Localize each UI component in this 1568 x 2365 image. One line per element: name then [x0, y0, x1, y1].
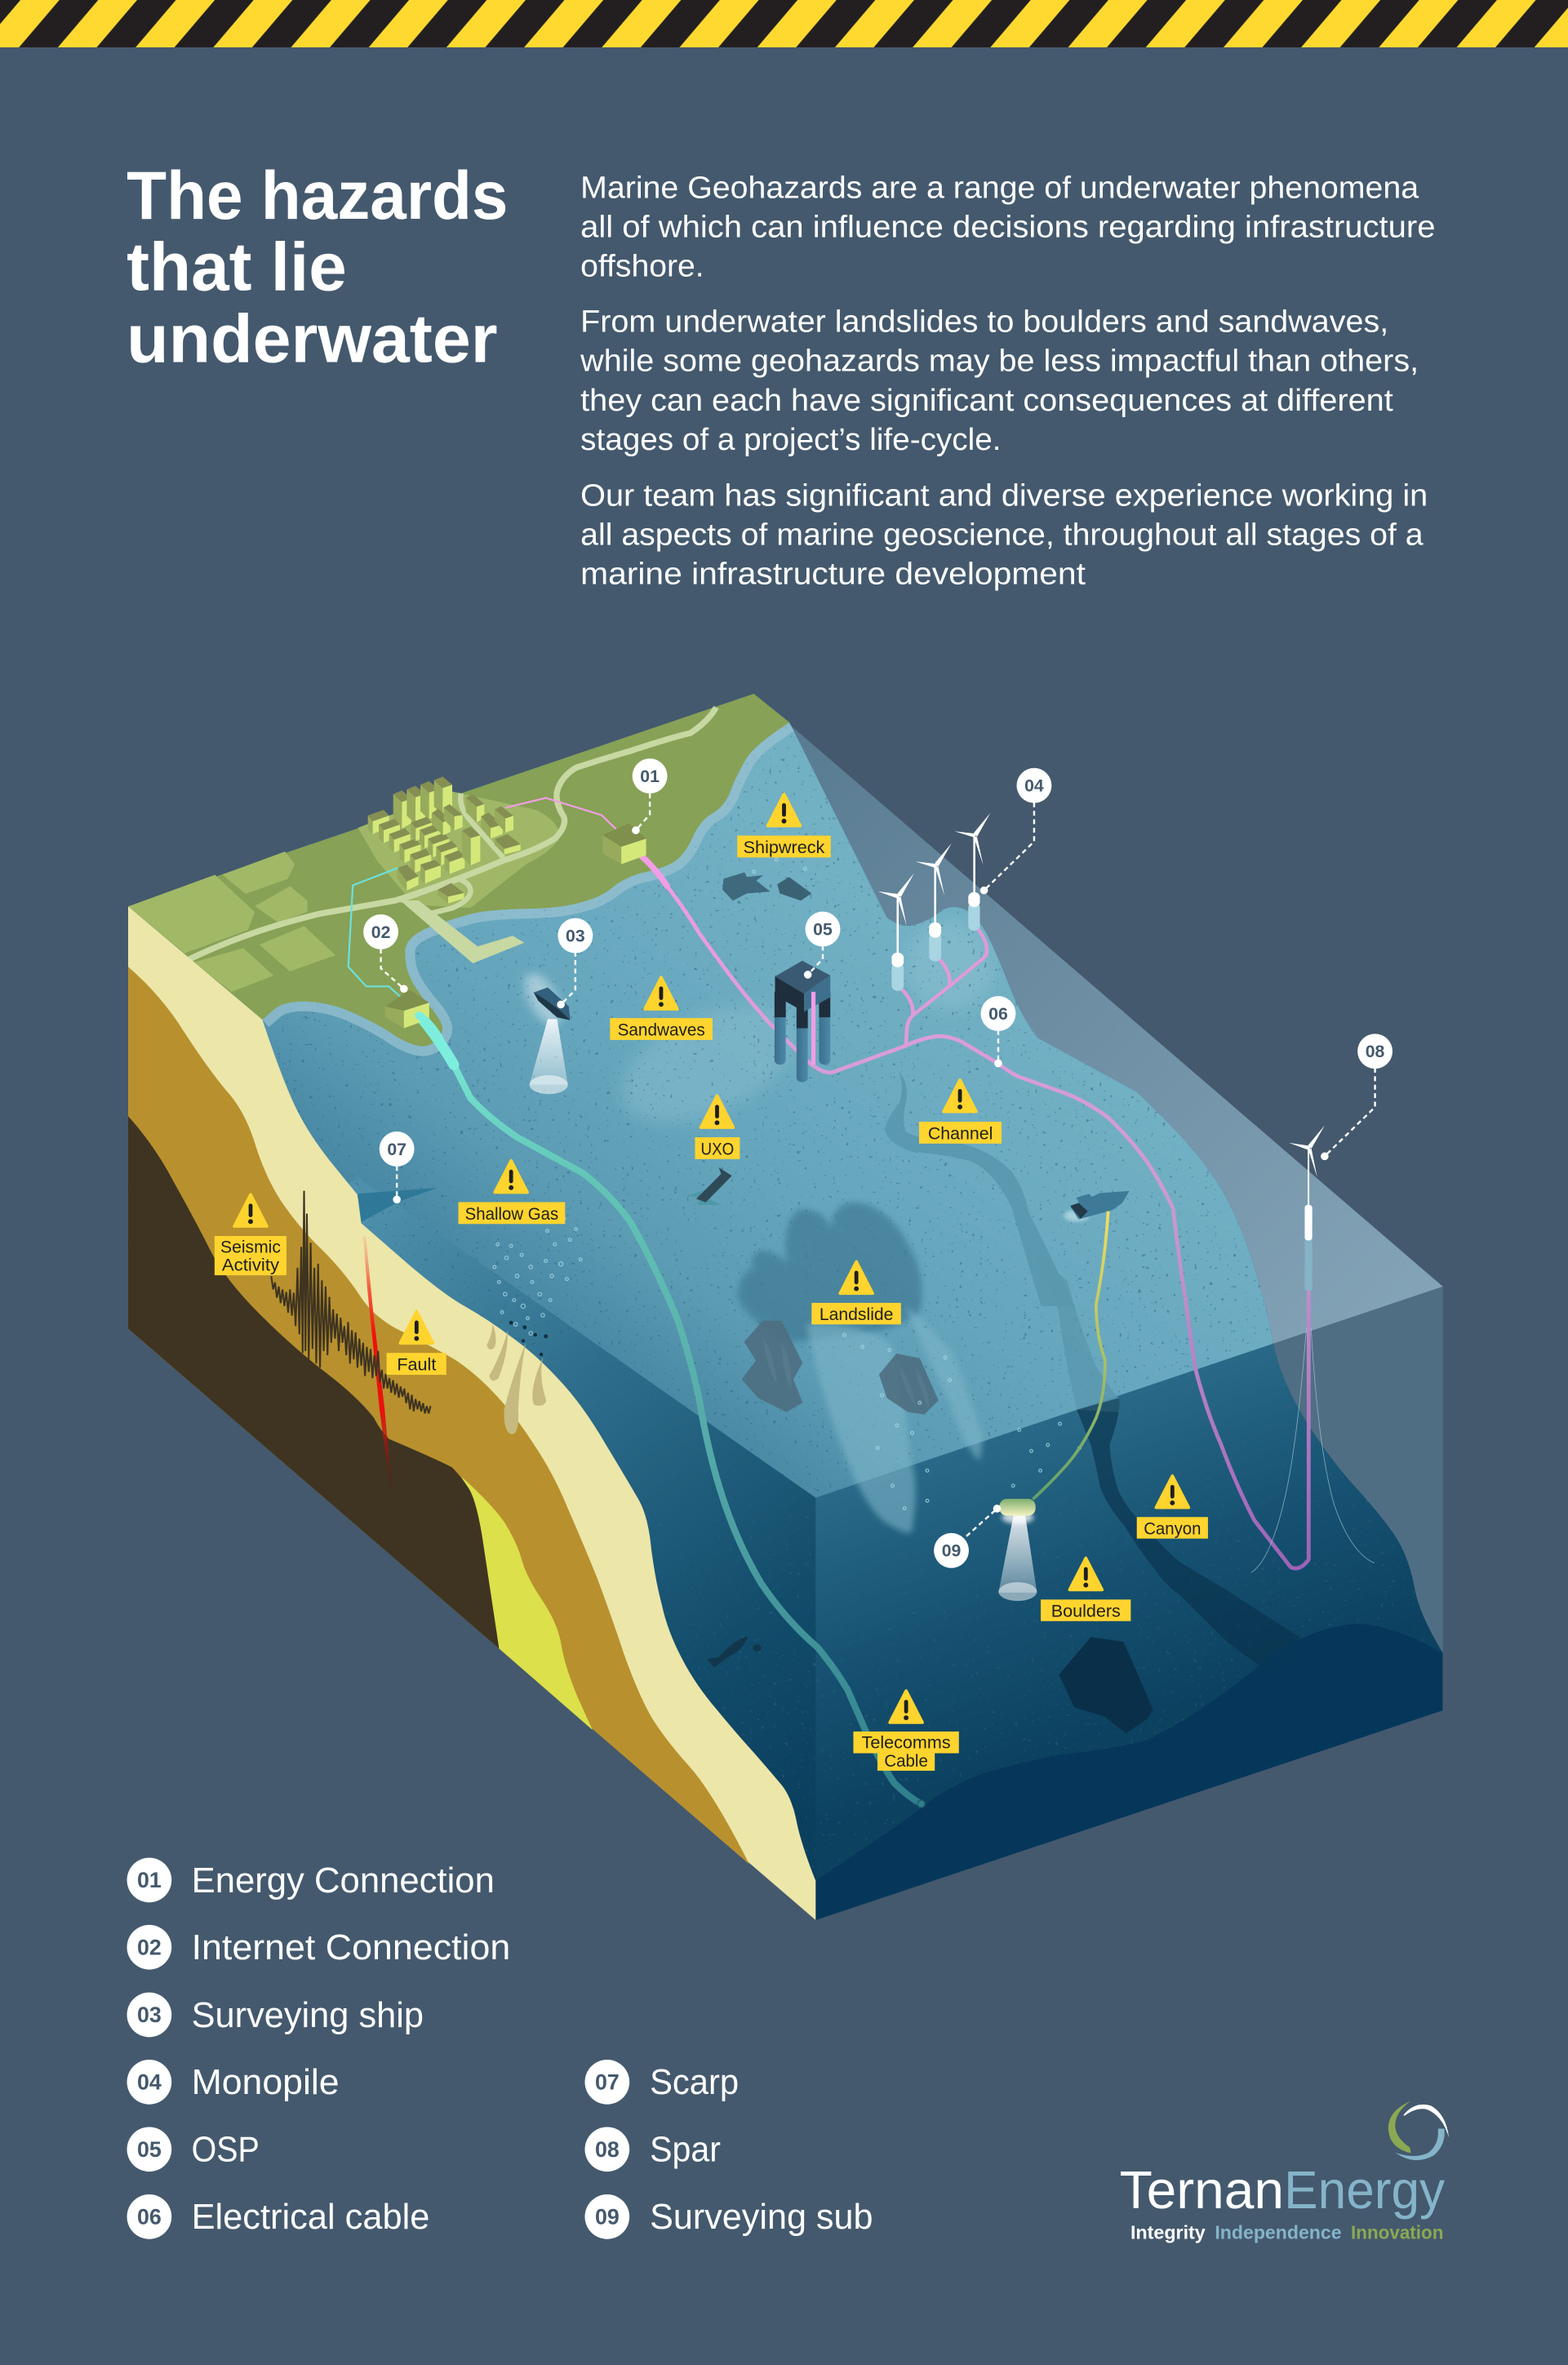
pin 03: 03	[566, 926, 585, 945]
intro text: stages of a project’s life-cycle.	[580, 423, 1001, 457]
spar mooring lines	[1251, 1327, 1375, 1572]
pin 09	[934, 1505, 1001, 1568]
landslide dark lobes	[737, 1203, 922, 1342]
landslide rocks	[742, 1321, 939, 1415]
label: shallow gas	[459, 1161, 565, 1224]
label: telecomms cable	[853, 1691, 959, 1771]
label: seismic activity: Seismic	[220, 1237, 281, 1256]
legend item 03: Surveying ship	[192, 1996, 424, 2035]
logo: Ternan Energy	[1120, 2100, 1449, 2243]
scarp	[358, 1188, 438, 1222]
internet building 02	[385, 990, 440, 1041]
intro text: all of which can influence decisions regarding infrastructure	[580, 211, 1435, 245]
pin 01: 01	[640, 767, 660, 786]
jetty	[400, 900, 524, 963]
label: channel: Channel	[928, 1123, 993, 1143]
energy building 01	[602, 824, 646, 865]
label: landslide: Landslide	[820, 1305, 893, 1324]
pin 09: 09	[942, 1541, 962, 1561]
label: telecomms cable: Cable	[884, 1751, 928, 1771]
label: landslide	[811, 1261, 901, 1324]
pin 05: 05	[813, 919, 833, 939]
cross-section: yellow layer	[461, 1477, 593, 1730]
cross-section: dark bedrock	[128, 1116, 499, 1648]
legend item 09	[584, 2194, 873, 2239]
towed survey ship	[1064, 1191, 1130, 1221]
legend	[127, 1858, 873, 2239]
land	[128, 694, 789, 1047]
seabed	[128, 694, 1443, 1923]
label: seismic activity: Activity	[222, 1256, 279, 1275]
label: shipwreck: Shipwreck	[744, 838, 825, 857]
legend item 08: 08	[595, 2137, 620, 2162]
legend item 08	[584, 2127, 721, 2172]
UXO	[688, 1167, 732, 1205]
label: shallow gas: Shallow Gas	[465, 1204, 558, 1224]
hazard stripe band	[0, 0, 1568, 47]
pin 08: 08	[1366, 1042, 1385, 1061]
legend item 01: 01	[137, 1868, 162, 1892]
cross-section: gold layer	[128, 967, 749, 1865]
logo tagline: Integrity	[1130, 2222, 1206, 2243]
label: seismic activity	[215, 1194, 287, 1275]
legend item 07: Scarp	[650, 2063, 739, 2102]
channel lower	[1057, 1274, 1119, 1412]
cross-section: sand layer	[128, 906, 815, 1920]
pin 04: 04	[1024, 776, 1044, 796]
intro text: all aspects of marine geoscience, throughout all stages of a	[580, 518, 1424, 552]
label: shipwreck	[737, 794, 831, 857]
logo tagline	[1130, 2222, 1443, 2243]
legend item 06: Electrical cable	[192, 2198, 429, 2237]
intro text: they can each have significant consequences at different	[580, 384, 1393, 418]
deep seabed floor	[815, 1624, 1442, 1923]
legend item 01: Energy Connection	[192, 1861, 495, 1900]
title	[127, 158, 508, 376]
pin 03	[557, 918, 593, 1008]
legend item 02: Internet Connection	[192, 1928, 510, 1967]
legend item 05: OSP	[192, 2131, 260, 2170]
intro text: while some geohazards may be less impactful than others,	[580, 344, 1419, 379]
intro text: Our team has significant and diverse experience working in	[580, 478, 1428, 513]
city ground	[358, 791, 559, 908]
cable: telecoms	[419, 1015, 922, 1804]
intro text: Marine Geohazards are a range of underwater phenomena	[580, 171, 1419, 206]
pin 07	[380, 1131, 415, 1203]
panel: isometric seabed block	[128, 694, 1443, 1923]
fields	[128, 851, 335, 992]
spar turbine 08	[1289, 1125, 1325, 1291]
label: channel	[919, 1080, 1002, 1144]
shallow water ring around coast	[262, 722, 789, 1047]
boulders rock	[1059, 1637, 1153, 1733]
pin 04	[980, 768, 1051, 894]
surveying sub 09	[998, 1499, 1037, 1601]
telecoms cable end	[917, 1800, 925, 1807]
label: UXO	[695, 1096, 740, 1159]
pin 05	[804, 912, 840, 979]
logo wordmark: Energy	[1284, 2160, 1446, 2220]
legend item 04	[127, 2060, 340, 2105]
label: boulders: Boulders	[1051, 1601, 1121, 1620]
seismic trace	[271, 1191, 431, 1413]
pin 08	[1321, 1034, 1393, 1160]
shallow gas plumes in sand	[486, 1324, 546, 1434]
bubbles	[493, 851, 1081, 1509]
dark gas bubbles	[509, 1321, 548, 1356]
legend item 09: 09	[595, 2205, 620, 2229]
label: telecomms cable: Telecomms	[862, 1733, 951, 1753]
surveying ship 03	[517, 970, 571, 1094]
legend item 06: 06	[137, 2205, 162, 2229]
fault line	[363, 1237, 392, 1487]
label: sandwaves: Sandwaves	[618, 1020, 705, 1039]
title: that lie	[127, 229, 347, 305]
fish	[707, 1636, 762, 1668]
logo swirl icon	[1388, 2100, 1449, 2160]
pin 06	[981, 996, 1015, 1067]
logo tagline: Independence	[1215, 2222, 1342, 2243]
label: UXO: UXO	[701, 1139, 734, 1158]
label: fault	[387, 1311, 446, 1375]
label: sandwaves	[610, 977, 713, 1040]
wind turbines monopiles 04	[878, 813, 990, 991]
label: canyon: Canyon	[1144, 1518, 1201, 1538]
title: The hazards	[127, 158, 508, 233]
pin 06: 06	[988, 1004, 1008, 1024]
intro text	[580, 171, 1435, 591]
logo wordmark: Ternan	[1120, 2160, 1284, 2220]
landslide light flows	[806, 1305, 983, 1533]
label: fault: Fault	[397, 1355, 436, 1375]
legend item 02: 02	[137, 1935, 162, 1959]
legend item 06	[127, 2194, 429, 2239]
legend item 03: 03	[137, 2003, 162, 2027]
thin land wiring	[349, 798, 621, 1002]
logo tagline: Innovation	[1351, 2222, 1443, 2243]
legend item 07: 07	[595, 2070, 620, 2095]
label: canyon	[1137, 1476, 1208, 1539]
legend item 08: Spar	[650, 2131, 721, 2170]
pin 01	[632, 758, 668, 834]
legend item 09: Surveying sub	[650, 2198, 873, 2237]
water front face glass	[815, 1287, 1443, 1920]
legend item 03	[127, 1993, 424, 2037]
legend item 05: 05	[137, 2137, 162, 2162]
intro text: From underwater landslides to boulders and sandwaves,	[580, 305, 1388, 339]
label: boulders	[1041, 1558, 1130, 1621]
roads	[189, 708, 716, 959]
logo wordmark	[1120, 2160, 1446, 2220]
OSP 05	[775, 961, 830, 1082]
legend item 04: Monopile	[192, 2063, 340, 2102]
shipwreck	[722, 872, 811, 900]
title: underwater	[127, 300, 498, 376]
pin 02: 02	[371, 922, 390, 942]
legend item 04: 04	[137, 2070, 162, 2095]
survey sub tow cable	[1033, 1211, 1108, 1499]
water surface glass back	[754, 694, 1443, 1498]
canyon	[815, 1398, 1442, 1923]
legend item 05	[127, 2127, 260, 2172]
cable: electrical	[635, 851, 1308, 1568]
pin 07: 07	[387, 1140, 406, 1159]
legend item 07	[584, 2060, 739, 2105]
intro text: marine infrastructure development	[580, 557, 1086, 591]
channel upper	[885, 1072, 1074, 1306]
intro text: offshore.	[580, 250, 704, 284]
city buildings	[368, 776, 521, 904]
pin 02	[363, 914, 408, 993]
